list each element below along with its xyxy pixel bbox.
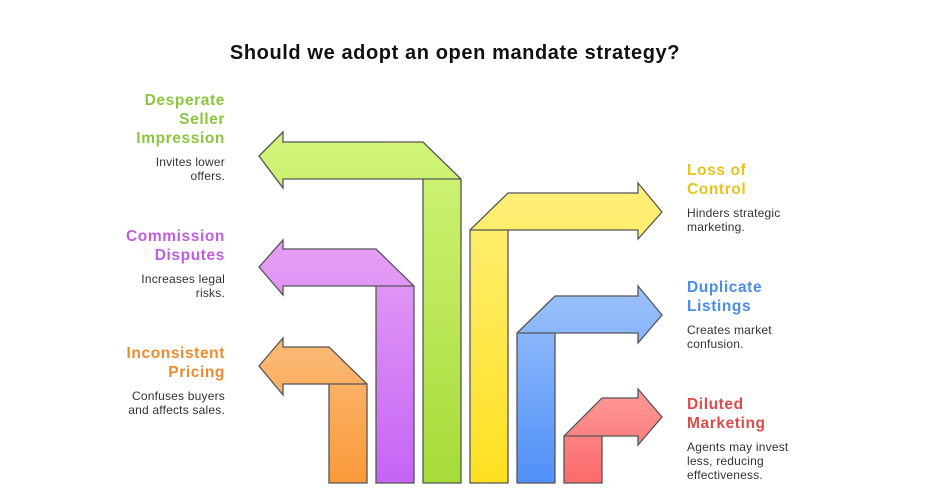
text: loss of control: Hinders strategic bbox=[687, 206, 780, 220]
text: diluted marketing: less, reducing bbox=[687, 454, 764, 468]
text: duplicate listings: Listings bbox=[687, 298, 751, 315]
arrow: red bbox=[564, 389, 662, 483]
text: loss of control: Loss of bbox=[687, 162, 746, 179]
text: commission disputes: Commission bbox=[126, 228, 225, 245]
text: duplicate listings bbox=[687, 279, 772, 351]
title: Should we adopt an open mandate strategy? bbox=[230, 42, 680, 64]
text: desperate seller: Desperate bbox=[145, 92, 225, 109]
text: diluted marketing: Agents may invest bbox=[687, 440, 788, 454]
arrow: yellow bbox=[470, 183, 662, 483]
arrow: orange bbox=[259, 338, 367, 483]
text: duplicate listings: Creates market bbox=[687, 323, 772, 337]
text: diluted marketing bbox=[687, 396, 788, 482]
text: desperate seller: Seller bbox=[179, 111, 225, 128]
text: loss of control: marketing. bbox=[687, 220, 745, 234]
text: loss of control bbox=[687, 162, 780, 234]
text: desperate seller bbox=[136, 92, 225, 183]
text: inconsistent pricing bbox=[126, 345, 225, 417]
arrow: purple bbox=[259, 240, 414, 483]
text: inconsistent pricing: and affects sales. bbox=[128, 403, 225, 417]
arrow: green bbox=[259, 132, 461, 483]
text: duplicate listings: confusion. bbox=[687, 337, 744, 351]
text: inconsistent pricing: Pricing bbox=[168, 364, 225, 381]
text: desperate seller: offers. bbox=[190, 169, 225, 183]
text: desperate seller: Invites lower bbox=[156, 155, 225, 169]
text: commission disputes: risks. bbox=[196, 286, 225, 300]
arrow: blue bbox=[517, 286, 662, 483]
text: commission disputes: Increases legal bbox=[141, 272, 225, 286]
text: diluted marketing: Diluted bbox=[687, 396, 744, 413]
text: desperate seller: Impression bbox=[136, 130, 225, 147]
text: duplicate listings: Duplicate bbox=[687, 279, 762, 296]
text: commission disputes bbox=[126, 228, 225, 300]
text: inconsistent pricing: Confuses buyers bbox=[132, 389, 225, 403]
text: diluted marketing: Marketing bbox=[687, 415, 766, 432]
text: commission disputes: Disputes bbox=[155, 247, 225, 264]
text: loss of control: Control bbox=[687, 181, 746, 198]
text: diluted marketing: effectiveness. bbox=[687, 468, 763, 482]
text: inconsistent pricing: Inconsistent bbox=[126, 345, 225, 362]
